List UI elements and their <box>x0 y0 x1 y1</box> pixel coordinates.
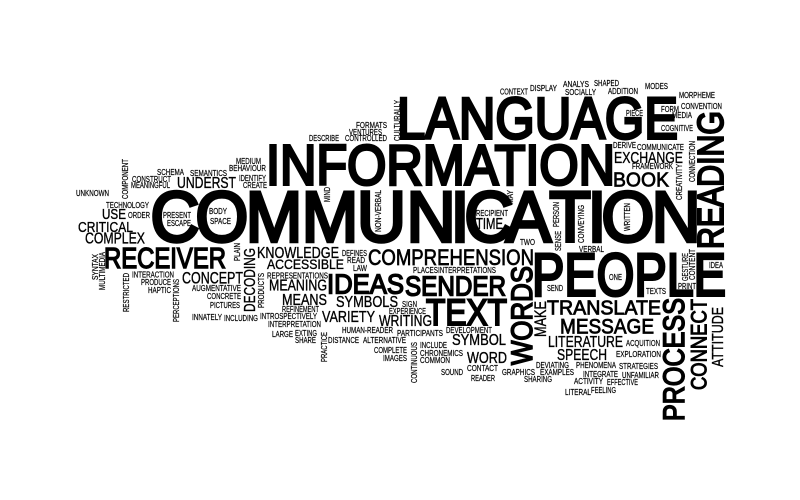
small words: centre cluster: PARTICIPANTS <box>397 329 443 338</box>
small words: centre cluster: SIGN <box>402 300 417 309</box>
word: CONNECT: CONNECT <box>686 299 712 390</box>
small words: right cluster: ACQUITION <box>626 339 660 348</box>
small words: right cluster: EXAMPLES <box>540 368 574 377</box>
small words: left cluster: PERCEPTIONS <box>172 279 181 322</box>
small words: centre cluster <box>260 187 632 383</box>
small words: centre cluster: EXTING <box>295 329 317 338</box>
small words: centre cluster: PRACTICE <box>320 332 329 362</box>
small words: left cluster: IDENTIFY <box>239 174 266 183</box>
small words: right cluster: FEELING <box>591 386 616 395</box>
word: WORDS: WORDS <box>506 266 539 365</box>
small words: centre cluster: CONTINUOUS <box>410 342 419 383</box>
small words: top cluster: CONTEXT <box>500 88 528 96</box>
small words: centre cluster: SENSE <box>554 231 563 251</box>
word: MAKE: MAKE <box>532 301 550 337</box>
small words: centre cluster: LARGE <box>272 330 293 339</box>
small words: centre cluster: COMPLETE <box>374 346 407 355</box>
word: RECEIVER: RECEIVER <box>104 243 226 275</box>
small words: right cluster: TEXTS <box>646 287 666 296</box>
small words: left cluster: ESCAPE <box>167 219 191 228</box>
small words: right cluster: ACTIVITY <box>574 377 604 386</box>
small words: right cluster: CONTENT <box>688 249 697 280</box>
small words: centre cluster: WRITTEN <box>623 203 632 231</box>
small words: centre cluster: MAY <box>506 189 515 204</box>
small words: top cluster: FORM <box>661 105 679 114</box>
small words: left cluster: TECHNOLOGY <box>106 201 150 210</box>
medium words <box>78 150 727 367</box>
word: ACCESSIBLE: ACCESSIBLE <box>267 256 344 272</box>
small words: left cluster: SPACE <box>210 217 231 226</box>
word: SENDER: SENDER <box>405 270 506 301</box>
small words: top cluster: MORPHEME <box>679 91 715 100</box>
small words: right cluster: PHENOMENA <box>576 361 617 370</box>
small words: centre cluster: SHARE <box>295 336 316 345</box>
small words: top cluster: DERIVE <box>613 141 636 150</box>
small words: left cluster: RESTRICTED <box>122 273 131 312</box>
small words: centre cluster: DEVELOPMENT <box>446 326 492 335</box>
small words: centre cluster: VERBAL <box>579 245 604 254</box>
small words: top cluster: ANALYS <box>563 80 589 89</box>
small words: centre cluster: CONTACT <box>467 364 498 373</box>
small words: top cluster: CONTROLLED <box>345 134 387 143</box>
small words: left cluster: MEDIUM <box>236 157 261 166</box>
word: WORD: WORD <box>467 350 507 367</box>
small words: top cluster: VENTURES <box>349 128 382 137</box>
small words: left cluster: SYNTAX <box>91 253 100 280</box>
word: UNDERST: UNDERST <box>177 175 236 192</box>
small words: top cluster: CONNECTION <box>688 141 697 182</box>
small words: centre cluster: INTERPRETATION <box>268 320 321 329</box>
small words: right cluster: PRINT <box>678 282 696 291</box>
small words: centre cluster: ONE <box>609 273 622 282</box>
small words: centre cluster: READER <box>471 374 495 383</box>
small words: right cluster <box>502 249 723 397</box>
small words: left cluster: PICTURES <box>210 301 240 310</box>
small words: right cluster: INTEGRATE <box>583 370 618 379</box>
small words: top cluster: CULTURALLY <box>393 99 402 141</box>
small words: centre cluster: READ <box>347 256 365 265</box>
small words: right cluster: LITERAL <box>565 388 591 397</box>
word: KNOWLEDGE: KNOWLEDGE <box>257 245 339 262</box>
small words: left cluster: CREATE <box>243 181 267 190</box>
small words: top cluster: COGNITIVE <box>661 124 693 133</box>
word: TEXT: TEXT <box>426 292 507 333</box>
small words: left cluster: COMPONENT <box>121 159 130 199</box>
word: COMPREHENSION: COMPREHENSION <box>368 245 534 270</box>
word: MEANS: MEANS <box>282 292 327 309</box>
small words: centre cluster: INCLUDE <box>420 341 447 350</box>
small words: centre cluster: HUMAN-READER <box>342 326 393 335</box>
word: USE: USE <box>102 207 126 223</box>
small words: top cluster: FORMATS <box>356 121 387 130</box>
small words: top cluster: ADDITION <box>608 87 638 96</box>
small words: left cluster: CONCRETE <box>207 292 241 301</box>
small words: top cluster: CONVENTION <box>681 102 722 111</box>
word: TIME: TIME <box>476 216 503 233</box>
small words: right cluster: UNFAMILIAR <box>622 371 659 380</box>
small words: right cluster: GRAPHICS <box>502 368 535 377</box>
small words: centre cluster: CHRONEMICS <box>420 349 463 358</box>
small words: centre cluster: CONVEYING <box>577 205 586 243</box>
small words: left cluster: MULTIMEDIA <box>98 251 107 290</box>
small words: right cluster: IDEA <box>709 261 723 270</box>
small words: left cluster: SEMANTICS <box>190 169 227 178</box>
word: WRITING: WRITING <box>379 313 432 330</box>
word: CONCEPT: CONCEPT <box>182 270 243 288</box>
small words: right cluster: STRATEGIES <box>619 362 658 371</box>
small words: centre cluster: NON-VERBAL <box>374 190 383 232</box>
small words: right cluster: DEVIATING <box>536 361 569 370</box>
small words: left cluster: PRESENT <box>163 211 191 220</box>
small words: top cluster: COMMUNICATE <box>637 143 684 152</box>
small words: top cluster <box>309 79 722 200</box>
word: COMPLEX: COMPLEX <box>85 230 146 248</box>
small words: right cluster: EFFECTIVE <box>607 378 638 387</box>
small words: right cluster: EXPLORATION <box>616 350 661 359</box>
word: IDEAS: IDEAS <box>327 268 404 299</box>
small words: right cluster: GESTURE <box>681 253 690 281</box>
word: CRITICAL: CRITICAL <box>78 219 133 236</box>
word: SPEECH: SPEECH <box>557 347 607 364</box>
small words: centre cluster: RECIPIENT <box>476 209 508 218</box>
small words: left cluster: INTERACTION <box>132 270 174 280</box>
word: INFORMATION: INFORMATION <box>266 134 615 198</box>
small words: top cluster: SHAPED <box>594 79 619 88</box>
word: MEANING: MEANING <box>269 278 327 294</box>
word: SYMBOLS: SYMBOLS <box>336 294 398 311</box>
small words: left cluster: MEANINGFUL <box>131 181 170 190</box>
small words: centre cluster: EXPERIENCE <box>389 307 426 316</box>
word: DECODING: DECODING <box>242 248 259 312</box>
small words: left cluster: INNATELY <box>192 313 223 322</box>
word: LITERATURE: LITERATURE <box>548 334 623 351</box>
small words: top cluster: PIECE <box>626 109 643 118</box>
small words: left cluster: PRODUCE <box>141 278 171 287</box>
word: COMMUNICATION: COMMUNICATION <box>150 177 701 257</box>
word: BOOK: BOOK <box>613 169 669 192</box>
small words: left cluster <box>76 157 267 323</box>
word: READING: READING <box>690 111 731 249</box>
small words: left cluster: CONSTRUCT <box>132 175 171 184</box>
small words: top cluster: SOCIALLY <box>565 88 597 97</box>
word: ATTITUDE: ATTITUDE <box>710 307 727 367</box>
small words: left cluster: AUGMENTATIVE <box>192 284 241 293</box>
small words: centre cluster: MIND <box>323 187 332 202</box>
small words: centre cluster: DISTANCE <box>328 336 359 345</box>
small words: left cluster: BEHAVIOUR <box>229 164 266 173</box>
small words: centre cluster: DEFINES <box>342 249 367 258</box>
small words: top cluster: MEDIA <box>672 111 693 120</box>
small words: left cluster: SCHEMA <box>157 168 185 177</box>
small words: centre cluster: COMMON <box>420 356 450 365</box>
small words: left cluster: HAPTIC <box>148 286 171 295</box>
small words: top cluster: MODES <box>645 82 668 91</box>
small words: left cluster: PLAIN <box>233 243 242 261</box>
word: SYMBOL: SYMBOL <box>452 332 506 349</box>
small words: centre cluster: REFINEMENT <box>282 305 319 314</box>
small words: centre cluster: REPRESENTATIONS <box>267 272 328 280</box>
small words: centre cluster: INTERPRETATIONS <box>438 266 496 275</box>
small words: centre cluster: ALTERNATIVE <box>363 336 406 345</box>
large words <box>104 86 731 421</box>
small words: left cluster: BODY <box>209 207 228 216</box>
small words: right cluster: SHARING <box>524 375 552 384</box>
small words: centre cluster: INTROSPECTIVELY <box>260 312 318 321</box>
small words: centre cluster: TWO <box>520 238 535 247</box>
small words: centre cluster: LAW <box>353 264 367 273</box>
word: LANGUAGE: LANGUAGE <box>397 86 678 152</box>
small words: centre cluster: PERSON <box>552 202 561 227</box>
word: EXCHANGE: EXCHANGE <box>614 150 683 167</box>
small words: centre cluster: SOUND <box>441 368 463 377</box>
small words: centre cluster: IMAGES <box>383 354 407 363</box>
small words: top cluster: FRAMEWORK <box>632 162 674 171</box>
small words: top cluster: CREATIVITY <box>675 163 684 200</box>
word: VARIETY: VARIETY <box>322 309 375 326</box>
small words: left cluster: UNKNOWN <box>76 189 109 198</box>
small words: left cluster: ORDER <box>128 211 150 220</box>
small words: top cluster: DISPLAY <box>530 84 558 93</box>
small words: left cluster: PRODUCTS <box>257 273 266 308</box>
small words: centre cluster: PLACES <box>413 266 438 275</box>
small words: left cluster: INCLUDING <box>224 314 258 323</box>
word: MESSAGE: MESSAGE <box>560 316 654 339</box>
small words: top cluster: DESCRIBE <box>309 134 339 143</box>
word: TRANSLATE: TRANSLATE <box>547 298 661 320</box>
word: PEOPLE: PEOPLE <box>532 242 726 308</box>
word: PROCESS: PROCESS <box>658 298 691 421</box>
small words: centre cluster: SEND <box>547 284 563 293</box>
